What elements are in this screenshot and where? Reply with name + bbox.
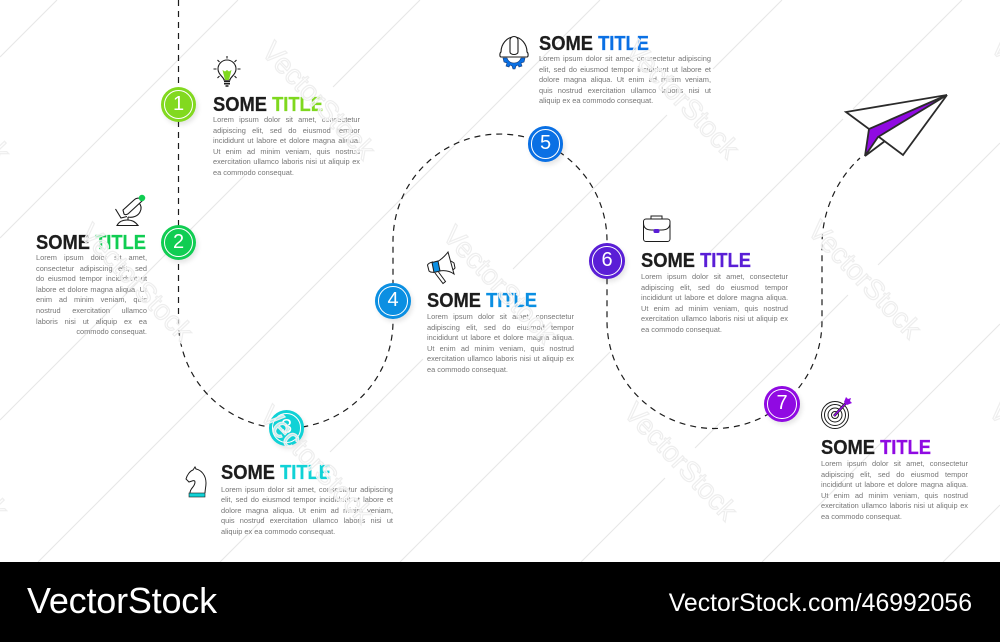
badge 2: 2 <box>173 231 184 253</box>
body text 5: elit, sed do eiusmod tempor incididunt ut labore et <box>539 65 711 74</box>
badge 4 <box>375 283 411 319</box>
step 3 text <box>221 461 393 536</box>
badge 5 <box>528 126 563 162</box>
body text 4: Ut enim ad minim veniam, quis nostrud <box>427 344 574 353</box>
step 4 text <box>427 289 574 374</box>
heading 1: SOME TITLE <box>213 93 323 116</box>
body text 1: Ut enim ad minim veniam, quis nostrud <box>213 147 360 156</box>
body text 7: ea commodo consequat. <box>821 512 902 521</box>
badge 1: 1 <box>173 93 184 115</box>
badge 7: 7 <box>776 392 788 414</box>
badge 3 <box>269 410 304 446</box>
body text 2: commodo consequat. <box>76 327 147 336</box>
body text 4: incididunt ut labore et dolore magna aliqua. <box>427 333 574 342</box>
heading 6: SOME TITLE <box>641 249 751 272</box>
body text 6: Ut enim ad minim veniam, quis nostrud <box>641 304 788 313</box>
body text 1: exercitation ullamco laboris nisi ut aliquip ex <box>213 157 360 166</box>
body text 3: Lorem ipsum dolor sit amet, consectetur adipiscing <box>221 484 393 494</box>
badge 6 <box>589 243 625 279</box>
watermark overlay: VectorStock <box>620 34 746 165</box>
icon: light bulb <box>214 56 240 87</box>
body text 5: aliquip ex ea commodo consequat. <box>539 96 653 105</box>
watermark overlay: VectorStock <box>618 396 744 527</box>
body text 4: adipiscing elit, sed do eiusmod tempor <box>427 323 574 332</box>
body text 3: quis nostrud exercitation ullamco laboris nisi ut <box>221 516 393 525</box>
body text 5: quis nostrud exercitation ullamco laboris nisi ut <box>539 86 711 95</box>
badge 2 <box>161 225 196 260</box>
body text 1: incididunt ut labore et dolore magna aliqua. <box>213 136 360 145</box>
body text 2: consectetur adipiscing elit, sed <box>36 264 147 273</box>
body text 5: Lorem ipsum dolor sit amet, consectetur adipiscing <box>539 54 711 63</box>
step 1 text <box>213 93 360 177</box>
footer brand: VectorStock <box>27 580 217 621</box>
badge 6: 6 <box>601 249 613 271</box>
heading 3: SOME TITLE <box>221 461 331 484</box>
body text 3: dolore magna aliqua. Ut enim ad minim veniam, <box>221 506 393 515</box>
badge 7 <box>764 386 800 422</box>
body text 5: dolore magna aliqua. Ut enim ad minim veniam, <box>539 75 711 84</box>
body text 3: aliquip ex ea commodo consequat. <box>221 527 335 536</box>
icon: helmet with gear <box>499 36 529 70</box>
badge 5: 5 <box>540 132 551 154</box>
body text 1: ea commodo consequat. <box>213 168 294 177</box>
heading 2: SOME TITLE <box>36 231 146 254</box>
body text 2: do eiusmod tempor incididunt ut <box>36 274 147 283</box>
icon: briefcase <box>643 216 670 242</box>
body text 6: incididunt ut labore et dolore magna aliqua. <box>641 293 788 302</box>
body text 2: nostrud exercitation ullamco <box>36 306 147 315</box>
icon: microscope <box>115 194 146 226</box>
heading 5: SOME TITLE <box>539 32 649 55</box>
watermark overlay: VectorStock <box>254 399 380 530</box>
body text 4: Lorem ipsum dolor sit amet, consectetur <box>427 312 574 321</box>
body text 3 <box>221 484 393 536</box>
icon: megaphone <box>427 251 456 284</box>
body text 6: adipiscing elit, sed do eiusmod tempor <box>641 283 788 292</box>
step 5 text <box>539 32 711 105</box>
body text 2: labore et dolore magna aliqua. Ut <box>36 285 147 294</box>
icon: knight chess piece <box>186 466 206 498</box>
body text 6: Lorem ipsum dolor sit amet, consectetur <box>641 272 788 281</box>
body text 7: exercitation ullamco laboris nisi ut aliquip ex <box>821 501 968 510</box>
body text 5 <box>539 54 711 105</box>
watermark overlay: VectorStock <box>256 35 382 166</box>
watermark overlay: VectorStock <box>802 214 928 345</box>
body text 7: incididunt ut labore et dolore magna aliqua. <box>821 480 968 489</box>
body text 6: exercitation ullamco laboris nisi ut aliquip ex <box>641 314 788 323</box>
watermark overlay: VectorStock <box>74 217 200 348</box>
body text 4: ea commodo consequat. <box>427 365 508 374</box>
heading 7: SOME TITLE <box>821 436 931 459</box>
body text 2 <box>36 253 147 336</box>
body text 1 <box>213 115 360 177</box>
watermark overlay: VectorStock <box>437 219 563 350</box>
body text 4: exercitation ullamco laboris nisi ut aliquip ex <box>427 354 574 363</box>
body text 7: adipiscing elit, sed do eiusmod tempor <box>821 470 968 479</box>
body text 2: laboris nisi ut aliquip ex ea <box>36 317 147 326</box>
body text 2: enim ad minim veniam, quis <box>36 295 147 304</box>
step 7 text <box>821 436 968 521</box>
body text 2: Lorem ipsum dolor sit amet, <box>36 253 147 262</box>
body text 7 <box>821 459 968 521</box>
footer image id: VectorStock.com/46992056 <box>669 590 972 617</box>
icon: target with dart <box>821 397 852 429</box>
icon: paper plane <box>844 94 948 157</box>
body text 6: ea commodo consequat. <box>641 325 722 334</box>
step 2 text <box>36 231 147 336</box>
badge 3: 3 <box>281 416 292 438</box>
body text 6 <box>641 272 788 334</box>
body text 3: elit, sed do eiusmod tempor incididunt ut labore et <box>221 495 393 504</box>
body text 7: Lorem ipsum dolor sit amet, consectetur <box>821 459 968 468</box>
footer bar <box>0 562 1000 642</box>
body text 7: Ut enim ad minim veniam, quis nostrud <box>821 491 968 500</box>
badge 4: 4 <box>387 289 399 311</box>
body text 1: adipiscing elit, sed do eiusmod tempor <box>213 126 360 135</box>
step 6 text <box>641 249 788 334</box>
badge 1 <box>161 87 196 122</box>
heading 4: SOME TITLE <box>427 289 537 312</box>
body text 4 <box>427 312 574 374</box>
body text 1: Lorem ipsum dolor sit amet, consectetur <box>213 115 360 124</box>
